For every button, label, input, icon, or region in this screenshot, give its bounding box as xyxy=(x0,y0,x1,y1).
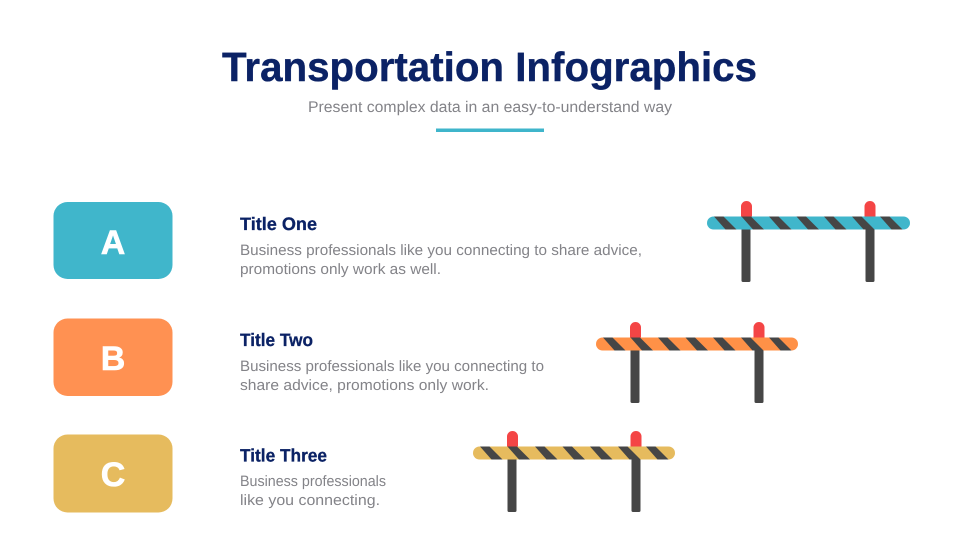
badge B: B xyxy=(101,340,125,378)
badge C xyxy=(54,434,172,512)
title underline xyxy=(436,128,544,132)
text block: Title One: promotions only work as well. xyxy=(240,261,441,278)
text block: Title Two xyxy=(240,330,544,394)
text block: Title Three: like you connecting. xyxy=(240,492,380,509)
text block: Title One: Business professionals like you connecting to share advice, xyxy=(240,242,642,259)
title: Transportation Infographics xyxy=(222,44,757,90)
text block: Title One xyxy=(240,214,642,278)
subtitle: Present complex data in an easy-to-understand way xyxy=(308,99,672,116)
barrier A xyxy=(707,201,910,282)
badge A xyxy=(54,202,172,279)
text block: Title Two: share advice, promotions only work. xyxy=(240,377,489,394)
barrier C xyxy=(473,431,675,512)
text block: Title Two: Business professionals like you connecting to xyxy=(240,358,544,375)
badge C: C xyxy=(101,456,125,494)
text block: Title Three: Business professionals xyxy=(240,473,386,490)
text block: Title One: Title One xyxy=(240,214,317,234)
text block: Title Three: Title Three xyxy=(240,446,327,466)
badge A: A xyxy=(101,224,125,262)
barrier B xyxy=(596,322,798,403)
badge B xyxy=(54,318,172,396)
text block: Title Three xyxy=(240,446,386,509)
text block: Title Two: Title Two xyxy=(240,330,313,350)
